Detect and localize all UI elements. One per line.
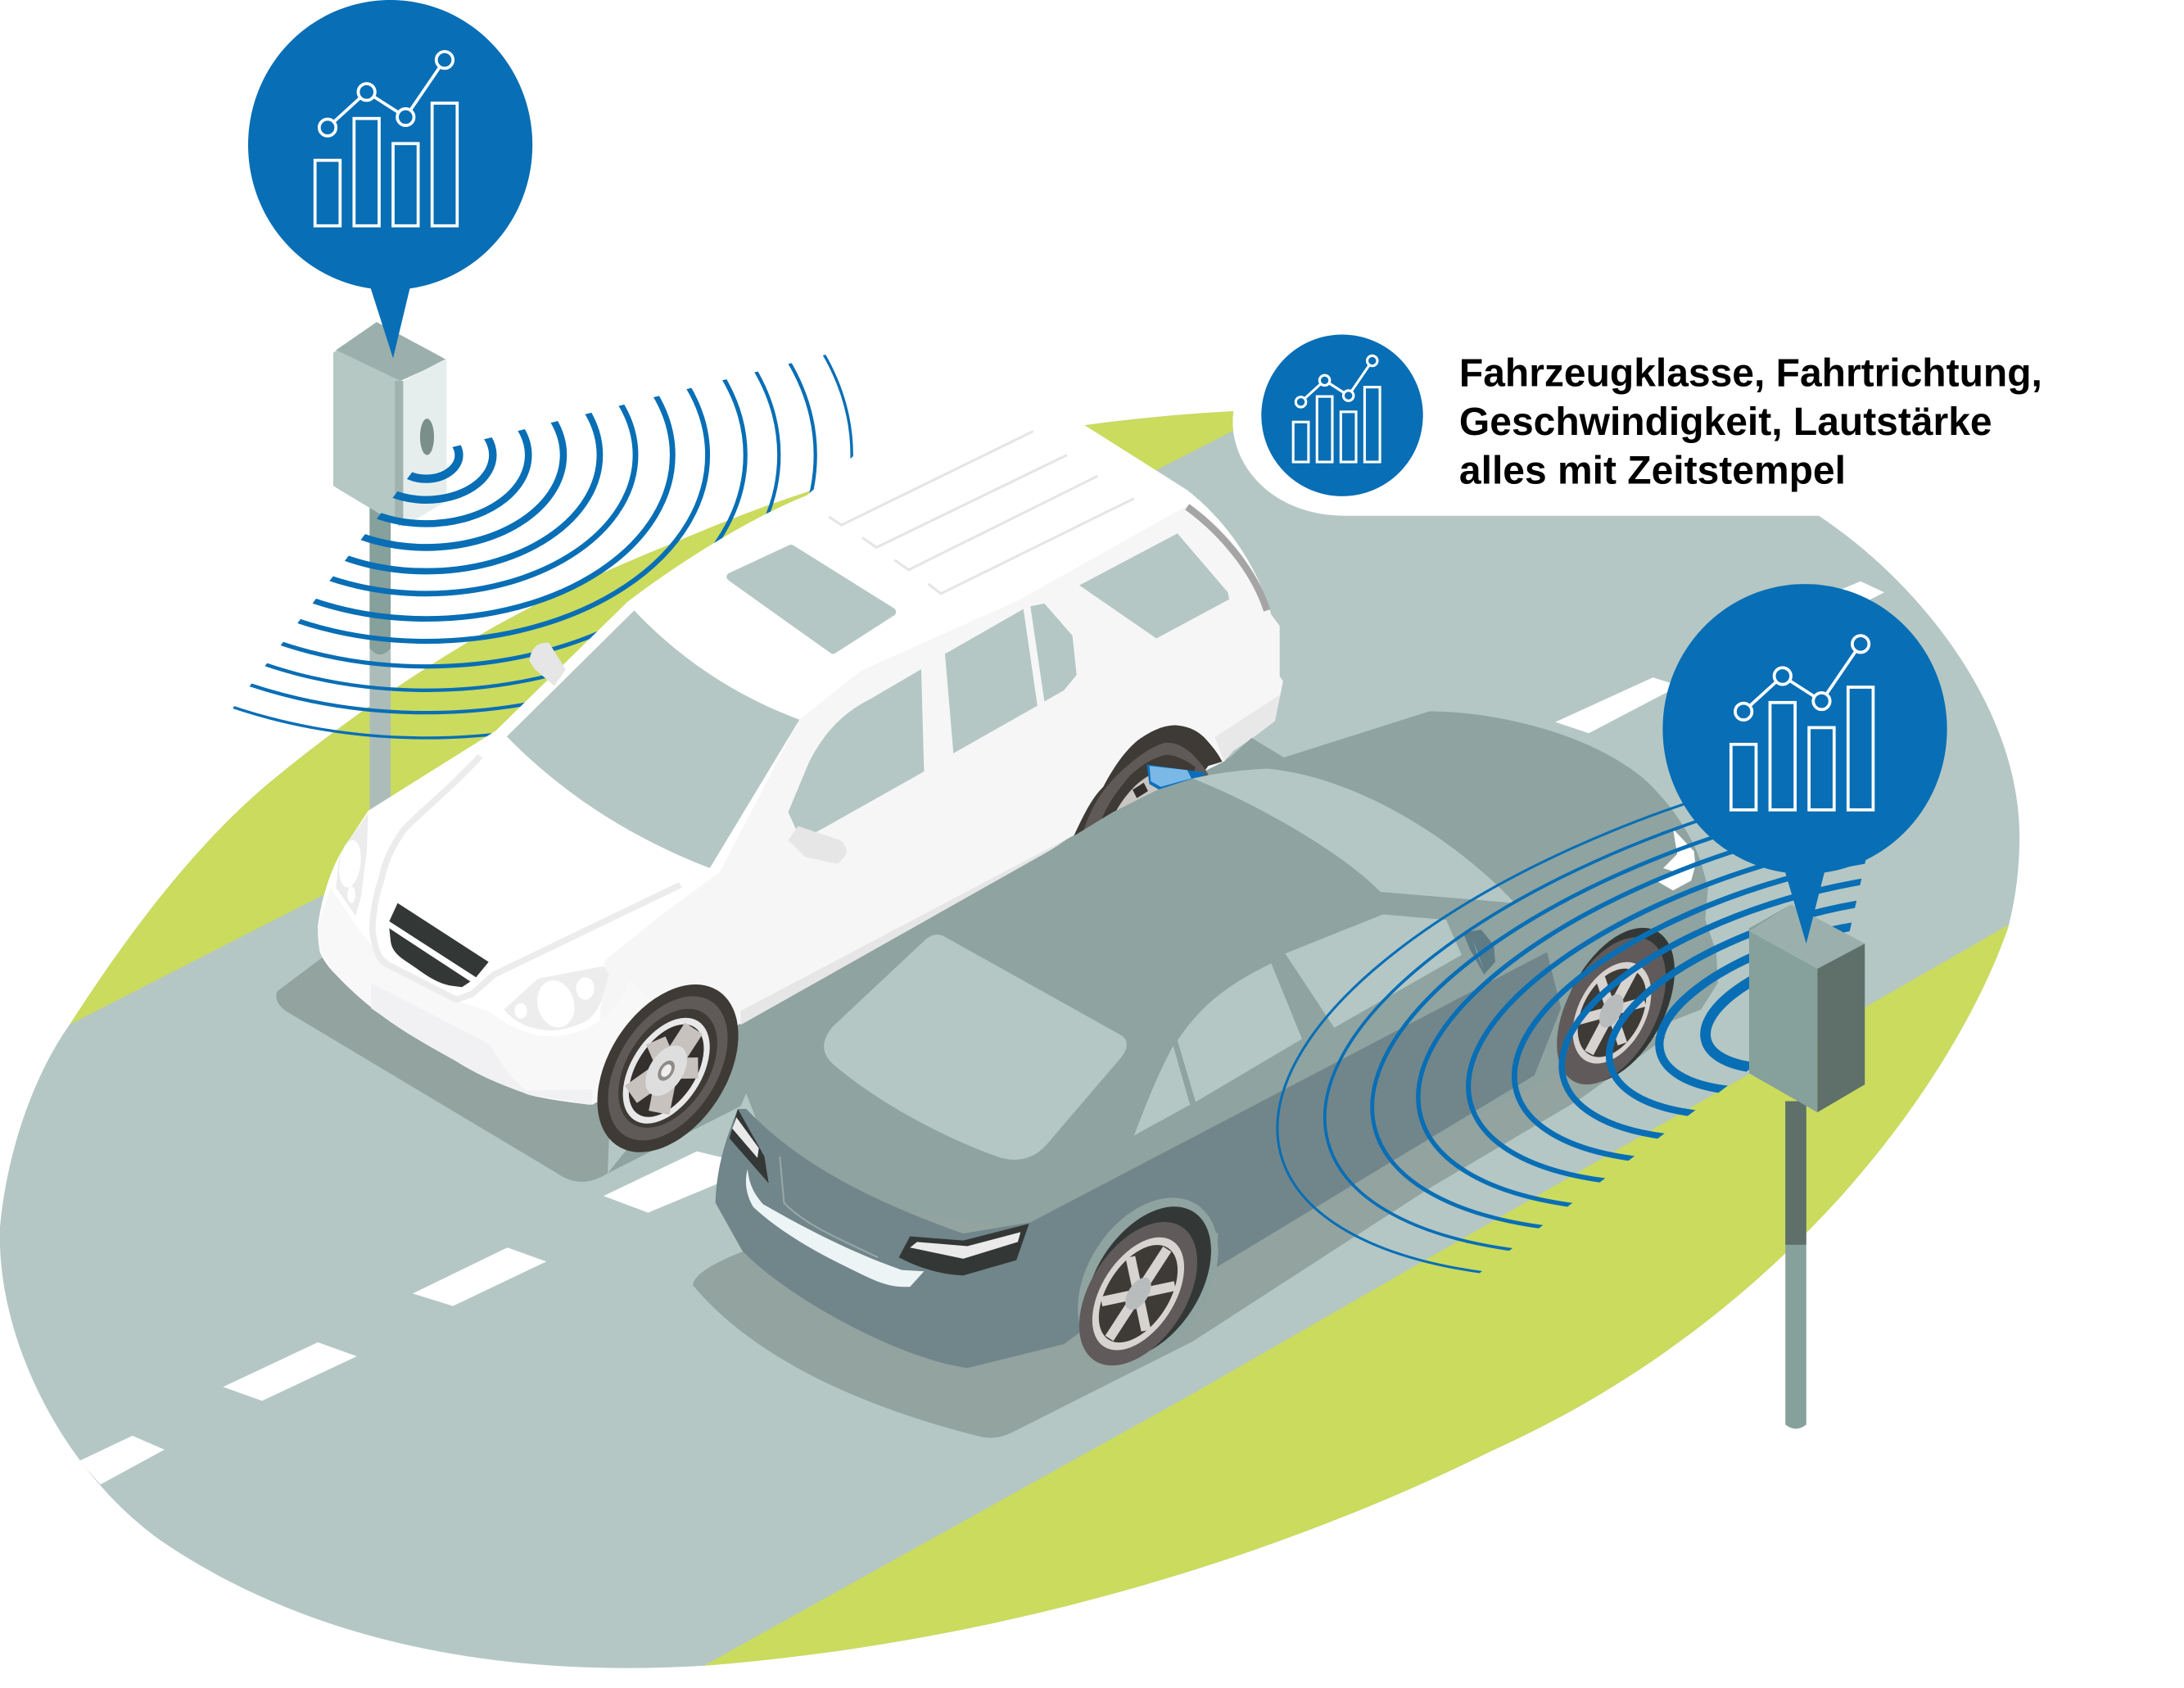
road centre dashes	[79, 582, 1884, 1485]
legend text: Geschwindigkeit, Lautstärke	[1459, 401, 1992, 444]
side windows	[789, 533, 1229, 840]
white car front wheel	[568, 959, 767, 1178]
sunroof	[730, 549, 892, 649]
right data bubble	[1662, 584, 1947, 944]
windshield	[507, 610, 799, 868]
right headlight	[504, 966, 609, 1032]
left sensor box	[333, 322, 446, 527]
left headlight	[336, 813, 369, 916]
right sensor box	[1749, 905, 1865, 1112]
white car body	[318, 403, 1283, 1105]
left headlamp	[730, 1109, 769, 1183]
ground: road ellipse	[0, 411, 2019, 1668]
bumper shading	[371, 983, 592, 1105]
white car shadow	[276, 957, 616, 1182]
dark car lower body	[716, 952, 1561, 1368]
green verge areas	[70, 411, 2010, 1666]
right sensor signal waves	[1276, 803, 1865, 1273]
front lower bumper	[318, 888, 658, 1105]
dark car top surfaces	[740, 769, 1680, 1232]
side mirror of dark car, blue glass	[1146, 764, 1207, 793]
legend text: Fahrzeugklasse, Fahrtrichtung,	[1459, 351, 2042, 395]
shaded gap between the cars	[608, 756, 1232, 1174]
icon: chart	[1731, 636, 1873, 810]
icon: chart	[315, 52, 457, 226]
left sensor pole	[369, 504, 391, 840]
dark car shadow	[693, 980, 1666, 1438]
legend text: alles mit Zeitstempel	[1459, 450, 1846, 493]
white car side panel	[592, 504, 1283, 1105]
side mirrors	[529, 643, 847, 864]
right headlamp	[899, 1224, 1029, 1275]
dark car side windows	[1134, 914, 1462, 1135]
rear glass	[1193, 769, 1515, 903]
legend text	[1459, 351, 2042, 493]
rear trim	[1187, 507, 1267, 610]
bonnet trim line	[780, 1156, 878, 1257]
roof rails	[829, 432, 1134, 594]
bumper light strip	[746, 1169, 924, 1287]
right sensor pole	[1785, 1102, 1806, 1428]
icon: small chart	[1293, 355, 1380, 462]
dark car rear body	[980, 711, 1718, 1267]
white car sill stripe	[740, 837, 1069, 1026]
dark car rear wheel	[1535, 909, 1698, 1102]
dark car front wheel	[1049, 1172, 1247, 1387]
white car	[318, 403, 1283, 1178]
left sensor signal waves	[233, 355, 853, 740]
legend	[1261, 334, 2042, 496]
left data bubble	[248, 0, 532, 358]
legend badge	[1261, 334, 1423, 496]
white car rear wheel	[1074, 726, 1223, 840]
dark car windshield	[824, 935, 1127, 1160]
rear bumper stripe	[1214, 695, 1280, 762]
hood crease	[373, 756, 681, 1000]
grille	[389, 903, 489, 987]
tail light	[1656, 829, 1695, 890]
dark car	[716, 711, 1718, 1387]
dark car side mirror	[1463, 930, 1495, 975]
